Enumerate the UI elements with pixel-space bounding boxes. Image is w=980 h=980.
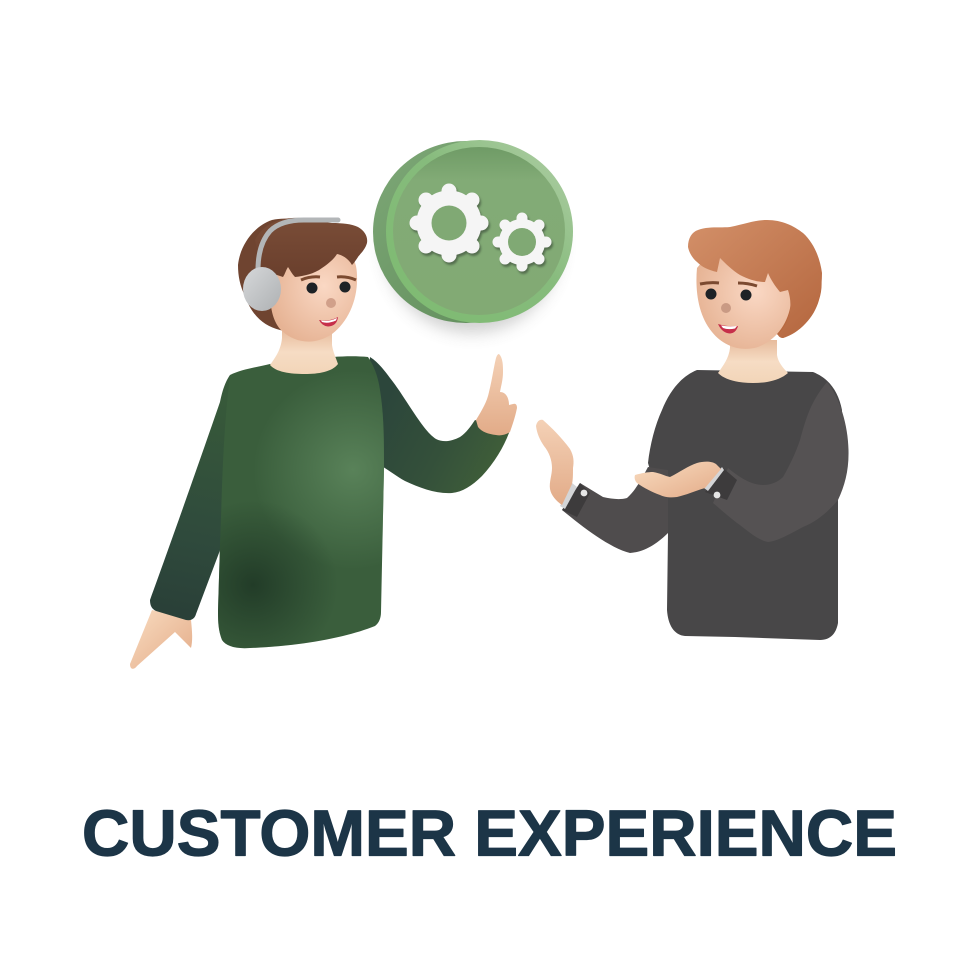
torso [648, 370, 842, 640]
left hand [130, 610, 192, 669]
far raised hand [536, 420, 574, 505]
brown hair [255, 218, 367, 277]
icon: large gear [417, 191, 481, 255]
icon: gear badge [373, 140, 573, 333]
back hair [238, 219, 330, 332]
near sleeve [713, 382, 849, 542]
right hand with pointing finger [476, 354, 517, 435]
near cuff [705, 468, 737, 500]
neck and collar [718, 340, 788, 383]
far cuff [562, 483, 590, 517]
orange hair [688, 220, 822, 338]
torso [218, 356, 384, 648]
face details [306, 282, 318, 294]
figure: left person with headset [130, 218, 517, 669]
icon: small gear [498, 218, 546, 266]
back hair [760, 240, 822, 338]
headphones [243, 220, 338, 311]
neck and collar [270, 330, 338, 374]
open palm hand [635, 462, 721, 497]
far arm [562, 467, 668, 553]
head [696, 250, 791, 349]
title: CUSTOMER EXPERIENCE [82, 796, 897, 870]
face details [706, 288, 716, 300]
figure: right person [536, 220, 849, 640]
right arm [366, 357, 510, 493]
left sleeve [150, 375, 240, 620]
head [270, 246, 357, 342]
